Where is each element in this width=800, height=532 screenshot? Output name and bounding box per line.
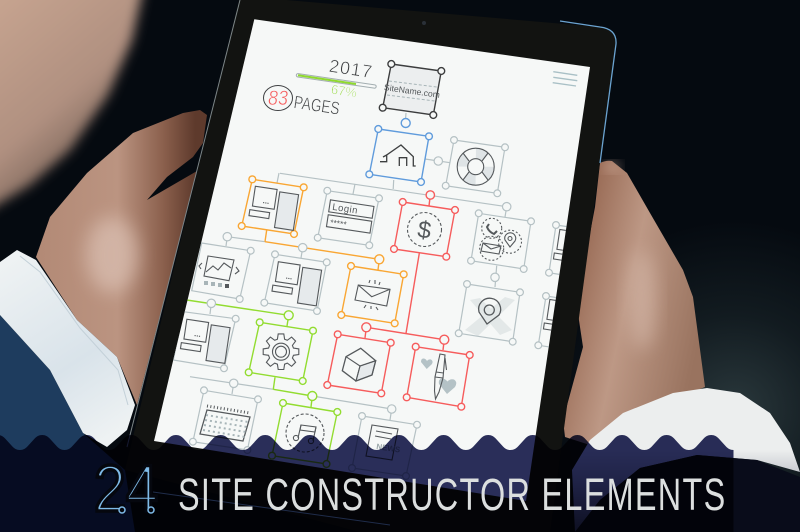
element: login xyxy=(314,187,382,249)
progress percent: 67% xyxy=(330,82,358,100)
element: payment xyxy=(391,191,458,260)
element: home xyxy=(366,118,432,185)
element: contact xyxy=(468,202,534,272)
element: login: Login xyxy=(332,202,359,217)
element: music xyxy=(269,392,341,467)
element: chart xyxy=(192,232,254,302)
progress bar xyxy=(298,75,374,86)
right hand xyxy=(563,161,705,445)
element: news xyxy=(349,405,420,479)
element: partial right top xyxy=(545,221,566,277)
left shirt cuff xyxy=(0,250,135,447)
element: partial right bottom xyxy=(534,292,556,350)
element: support ring xyxy=(434,137,508,197)
year label: 2017 xyxy=(328,56,374,82)
element: orange layout xyxy=(238,176,307,237)
element: settings gear xyxy=(245,311,316,384)
tablet screen xyxy=(154,19,590,501)
pages badge: 83 xyxy=(268,87,288,110)
left sleeve xyxy=(0,315,135,532)
gray connector lines xyxy=(190,113,507,420)
left hand xyxy=(36,110,207,405)
blurred head xyxy=(0,0,145,215)
element: site name xyxy=(379,61,445,118)
element: pen and hearts xyxy=(403,335,473,410)
element: site name: SiteName.com xyxy=(383,82,441,100)
wave band overlay xyxy=(0,435,733,532)
element: cube xyxy=(324,323,394,397)
element: map xyxy=(455,273,523,345)
element: payment: $ xyxy=(416,216,433,245)
colored connector lines xyxy=(187,195,444,407)
tablet lower edge glint xyxy=(153,492,390,525)
element: gray layout xyxy=(261,244,330,314)
tablet body xyxy=(125,0,616,532)
element: email xyxy=(338,255,407,327)
element: gray layout left xyxy=(173,299,239,372)
subtitle: SITE CONSTRUCTOR ELEMENTS xyxy=(178,471,725,520)
element: login: ***** xyxy=(329,217,348,230)
element: news: NEWS xyxy=(376,442,401,455)
right shirt cuff xyxy=(572,388,800,532)
hamburger menu xyxy=(553,72,577,86)
right sleeve xyxy=(575,455,800,532)
pages label: PAGES xyxy=(293,92,341,119)
number 24: 24 xyxy=(94,451,158,525)
element: calendar xyxy=(190,379,261,453)
